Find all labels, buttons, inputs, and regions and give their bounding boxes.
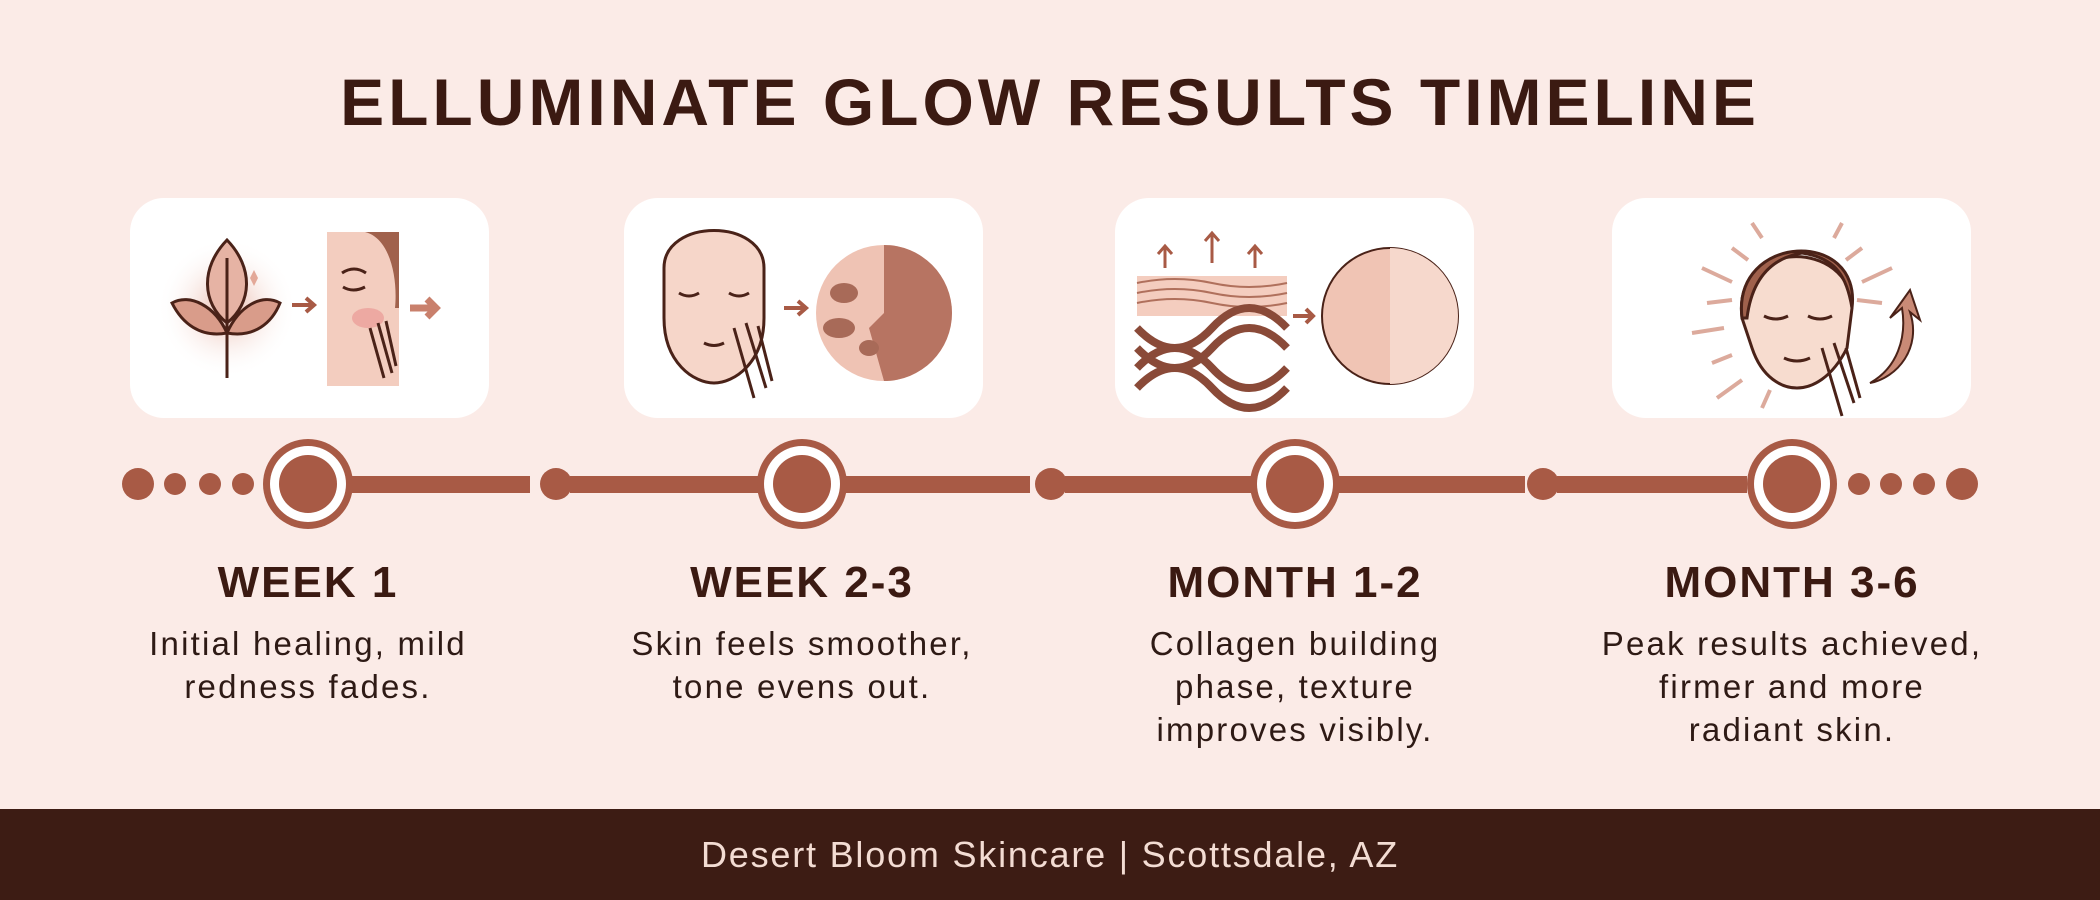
label: month 1-2: MONTH 1-2 (1167, 558, 1423, 607)
timeline (122, 439, 1978, 529)
text: month 1-2 (1150, 625, 1440, 748)
text: week 1 (149, 625, 467, 705)
text: week 1: Initial healing, mild (149, 625, 467, 662)
label: month 3-6: MONTH 3-6 (1664, 558, 1920, 607)
text: month 3-6 (1602, 625, 1982, 748)
card: week 1 (130, 198, 489, 418)
text: month 3-6: radiant skin. (1689, 711, 1895, 748)
title: ELLUMINATE GLOW RESULTS TIMELINE (340, 65, 1760, 139)
card: month 3-6 (1612, 198, 1971, 418)
text: month 1-2: improves visibly. (1156, 711, 1434, 748)
text: month 3-6: firmer and more (1659, 668, 1925, 705)
label: week 2-3: WEEK 2-3 (690, 558, 914, 607)
text: week 2-3 (631, 625, 973, 705)
text: week 1: redness fades. (184, 668, 432, 705)
label: week 1: WEEK 1 (218, 558, 398, 607)
text: month 3-6: Peak results achieved, (1602, 625, 1982, 662)
card: month 1-2 (1115, 198, 1474, 418)
footer (0, 809, 2100, 900)
footer: Desert Bloom Skincare | Scottsdale, AZ (701, 834, 1399, 875)
card: week 2-3 (624, 198, 983, 418)
text: week 2-3: tone evens out. (673, 668, 931, 705)
text: week 2-3: Skin feels smoother, (631, 625, 973, 662)
text: month 1-2: Collagen building (1150, 625, 1440, 662)
marker circles (263, 439, 1837, 529)
text: month 1-2: phase, texture (1175, 668, 1415, 705)
